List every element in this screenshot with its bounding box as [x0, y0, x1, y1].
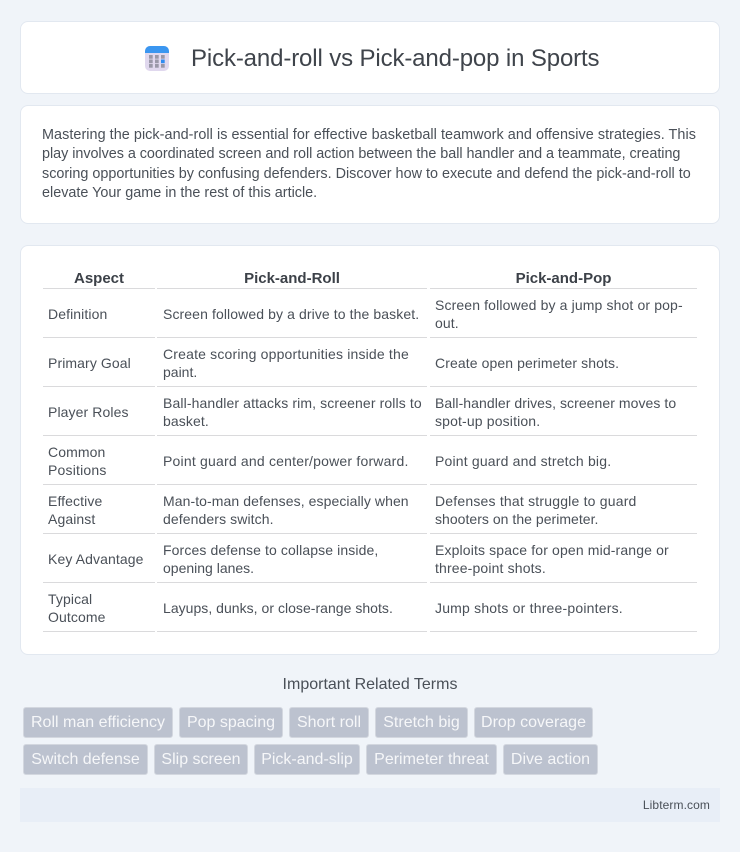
- row: Player Roles: Ball-handler drives, screener moves to: [435, 395, 676, 411]
- footer bar: [20, 788, 720, 822]
- row: Common Positions: Point guard and center/power forward.: [163, 453, 409, 469]
- row: Definition: out.: [435, 315, 459, 331]
- intro paragraph: elevate Your game in the rest of this article.: [42, 185, 317, 201]
- tag: [289, 707, 369, 738]
- row: Primary Goal: paint.: [163, 364, 197, 380]
- row: Effective Against: Man-to-man defenses, especially when: [163, 493, 409, 509]
- row: Effective Against: [48, 493, 637, 527]
- row: Common Positions: Point guard and stretch big.: [435, 453, 611, 469]
- row: Effective Against: defenders switch.: [163, 511, 274, 527]
- row: Effective Against: Against: [48, 511, 95, 527]
- tag: Pick-and-slip: [261, 751, 353, 768]
- footer credit: Libterm.com: [643, 798, 710, 812]
- row: Definition: Screen followed by a jump shot or pop-: [435, 297, 683, 313]
- tag: [179, 707, 283, 738]
- tag: Short roll: [297, 714, 361, 731]
- row: Common Positions: [48, 444, 611, 478]
- row: Typical Outcome: Typical: [48, 591, 92, 607]
- tag: Stretch big: [383, 714, 460, 731]
- tag: [503, 744, 598, 775]
- row: Player Roles: [48, 395, 676, 429]
- row: Definition: Definition: [48, 306, 107, 322]
- row: Definition: Screen followed by a drive to the basket.: [163, 306, 419, 322]
- row: Key Advantage: Forces defense to collapse inside,: [163, 542, 378, 558]
- row: Key Advantage: Key Advantage: [48, 551, 144, 567]
- table header: Aspect: [74, 270, 124, 287]
- icon: calendar grid: [145, 46, 169, 71]
- tag: Slip screen: [161, 751, 241, 768]
- table header: Pick-and-Pop: [516, 270, 611, 287]
- tag: Dive action: [511, 751, 590, 768]
- row: Key Advantage: opening lanes.: [163, 560, 254, 576]
- panel: comparison table: [20, 245, 720, 655]
- tag: Roll man efficiency: [31, 714, 165, 731]
- row: Player Roles: Ball-handler attacks rim, screener rolls to: [163, 395, 422, 411]
- row: Definition: [48, 297, 683, 331]
- row: Typical Outcome: Jump shots or three-pointers.: [435, 600, 623, 616]
- tag: [366, 744, 497, 775]
- intro paragraph: scoring opportunities by confusing defenders. Discover how to execute and defend the pick-and-roll to: [42, 166, 691, 182]
- tag: [23, 707, 173, 738]
- tag: Drop coverage: [481, 714, 586, 731]
- row: Effective Against: Defenses that struggle to guard: [435, 493, 637, 509]
- tag: [474, 707, 593, 738]
- row: Player Roles: Player Roles: [48, 404, 129, 420]
- intro paragraph: Mastering the pick-and-roll is essential for effective basketball teamwork and offensive strategies. This: [42, 127, 696, 143]
- row: Effective Against: Effective: [48, 493, 102, 509]
- heading: related terms: Important Related Terms: [283, 676, 457, 693]
- comparison table: [43, 270, 697, 632]
- row: Key Advantage: Exploits space for open mid-range or: [435, 542, 669, 558]
- tag: [254, 744, 360, 775]
- tag: [23, 744, 148, 775]
- row: Primary Goal: Create open perimeter shots.: [435, 355, 619, 371]
- row: Key Advantage: [48, 542, 669, 576]
- row: Player Roles: spot-up position.: [435, 413, 540, 429]
- row: Common Positions: Positions: [48, 462, 107, 478]
- row: Common Positions: Common: [48, 444, 105, 460]
- intro paragraph: play involves a coordinated screen and roll action between the ball handler and a teammate, creating: [42, 146, 680, 162]
- title: Pick-and-roll vs Pick-and-pop in Sports: [191, 45, 599, 72]
- table header: [74, 270, 611, 287]
- row: Primary Goal: Create scoring opportunities inside the: [163, 346, 409, 362]
- row: Typical Outcome: [48, 591, 623, 625]
- row: Primary Goal: Primary Goal: [48, 355, 131, 371]
- panel: title card: [20, 21, 720, 94]
- row: Primary Goal: [48, 346, 619, 380]
- tag: [375, 707, 468, 738]
- tag: Pop spacing: [187, 714, 275, 731]
- row: Typical Outcome: Outcome: [48, 609, 106, 625]
- row: Typical Outcome: Layups, dunks, or close-range shots.: [163, 600, 393, 616]
- tag: [154, 744, 248, 775]
- row: Player Roles: basket.: [163, 413, 209, 429]
- row: Key Advantage: three-point shots.: [435, 560, 546, 576]
- row: Effective Against: shooters on the perimeter.: [435, 511, 598, 527]
- tag: Switch defense: [31, 751, 140, 768]
- panel: intro text: [20, 105, 720, 224]
- intro paragraph: [42, 127, 696, 201]
- table header: Pick-and-Roll: [244, 270, 340, 287]
- tag: Perimeter threat: [374, 751, 489, 768]
- related term tags: [23, 707, 598, 775]
